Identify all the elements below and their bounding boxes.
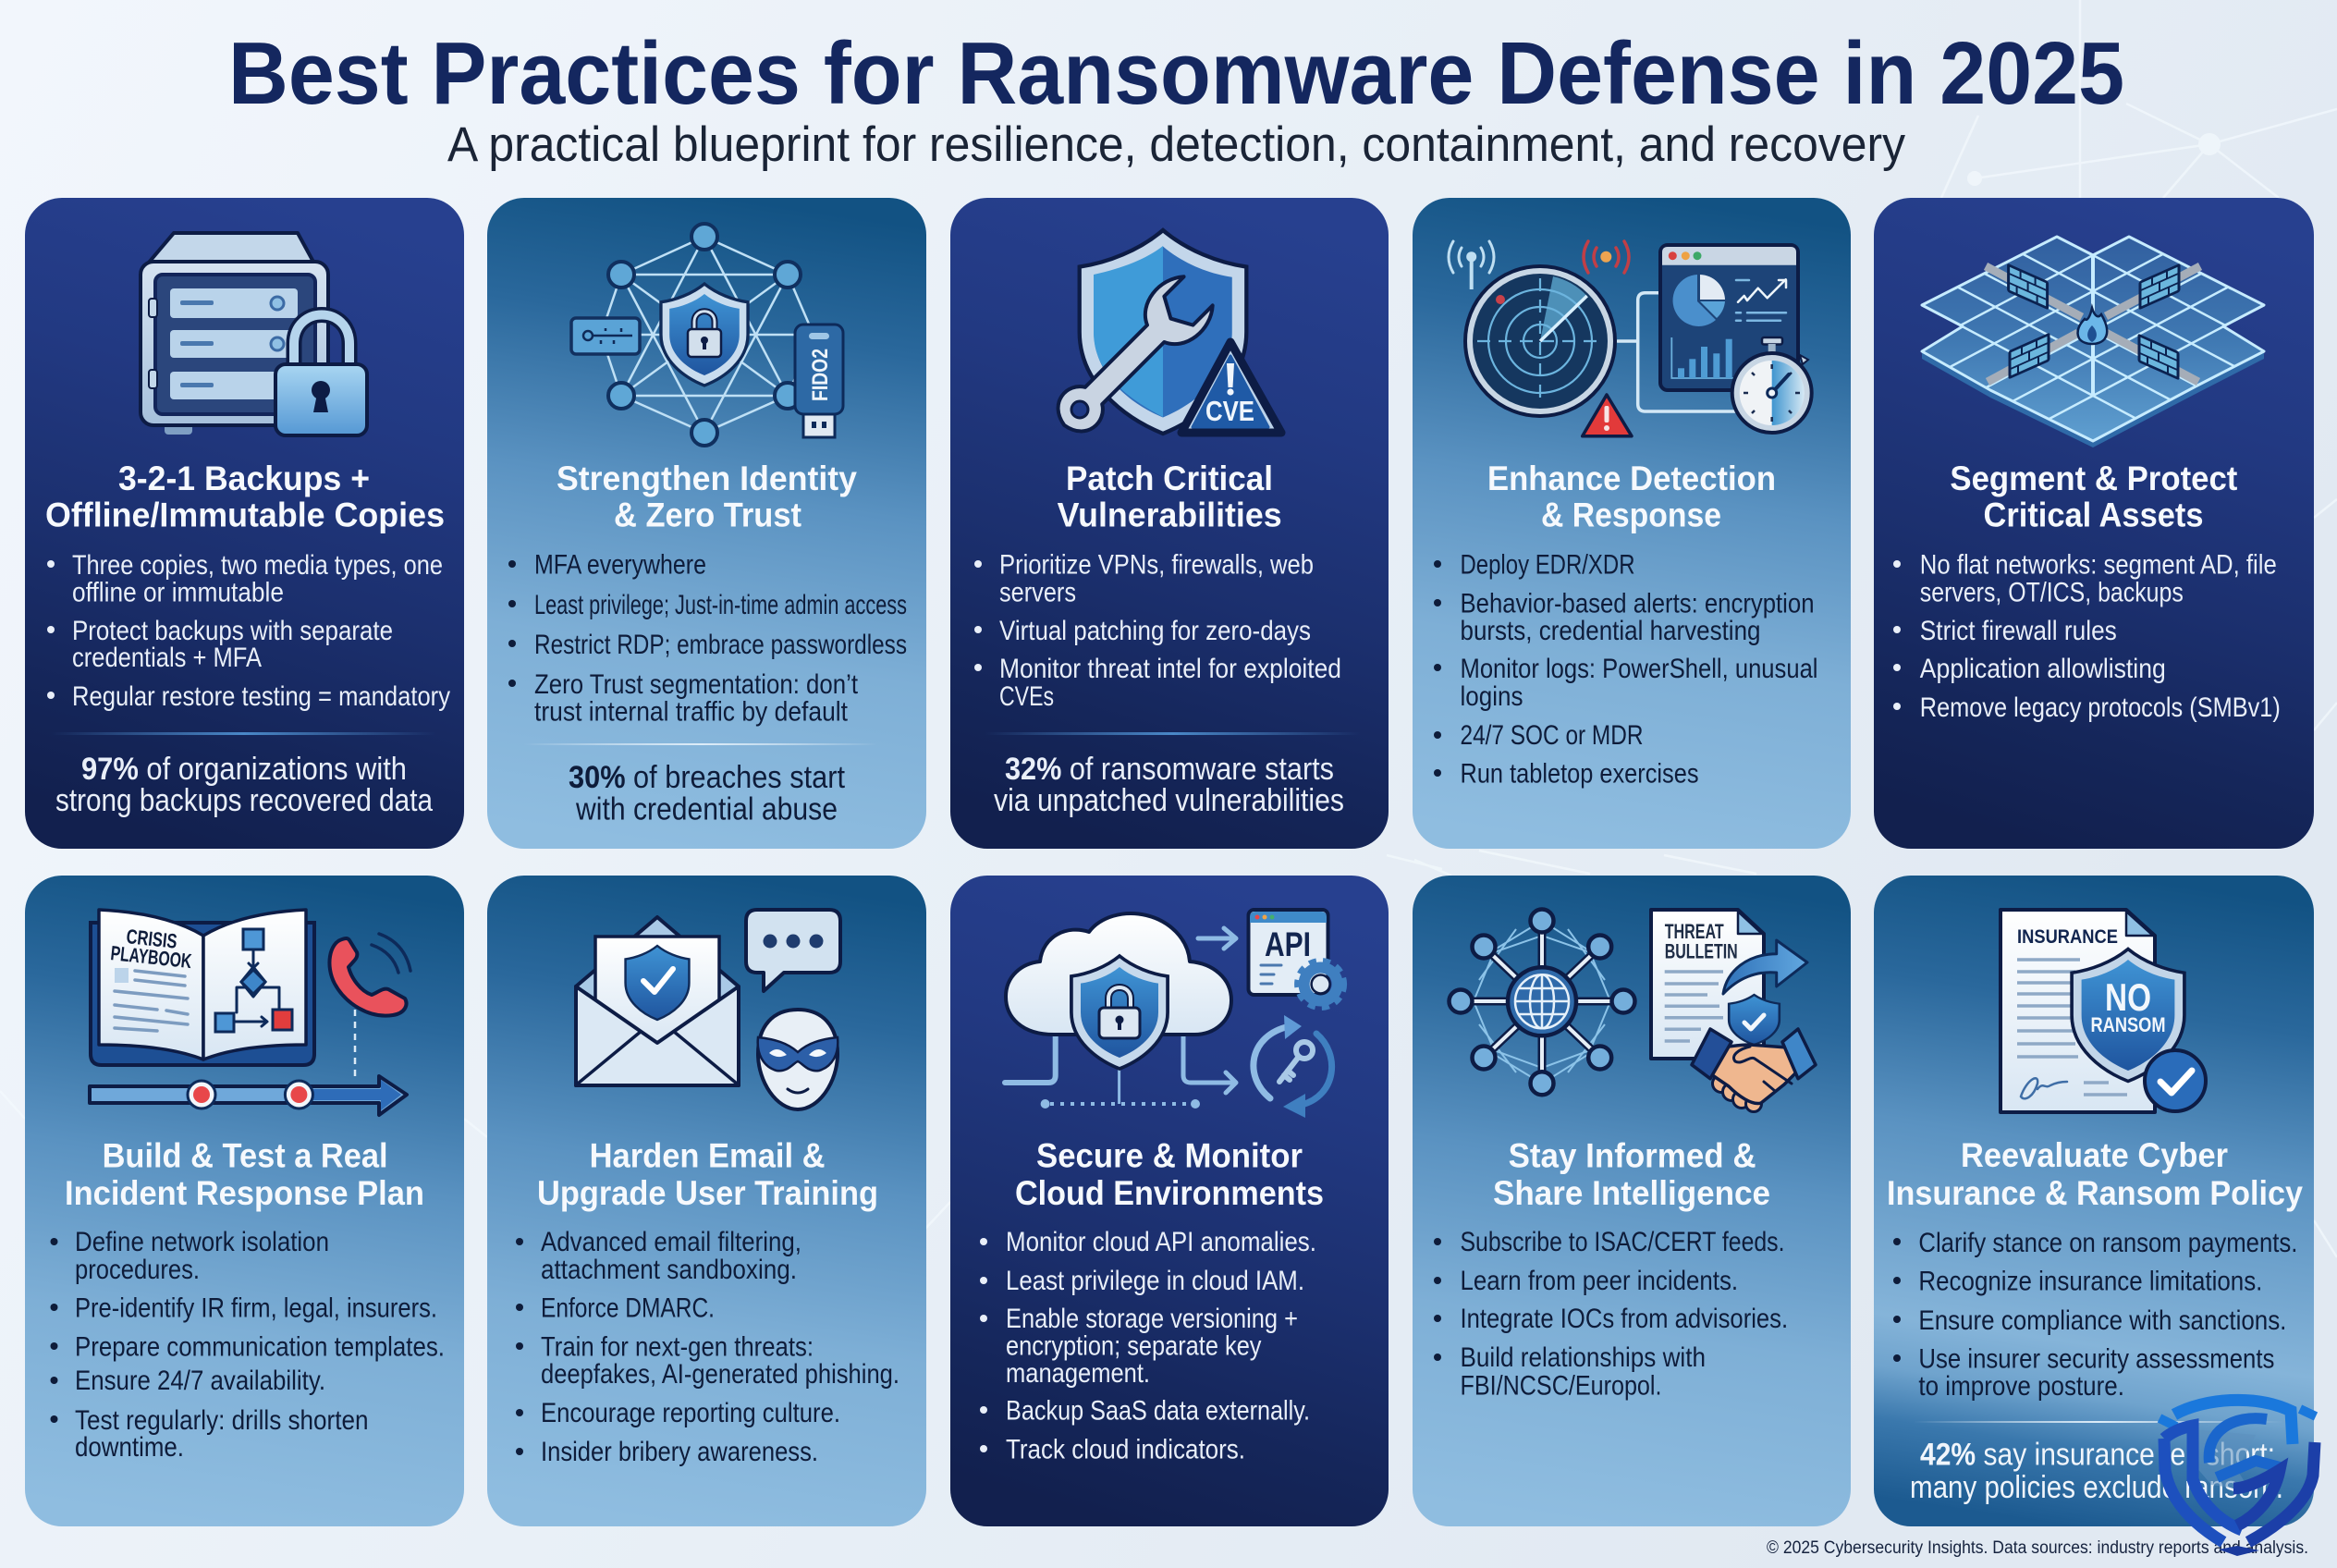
bullet list [1893, 1228, 2297, 1402]
bullet list: Train for next-gen threats: [541, 1332, 814, 1363]
icon: radar, dashboard and stopwatch [1449, 241, 1812, 436]
label: API: API [1265, 925, 1311, 963]
panel: segmentation [1874, 164, 2314, 849]
bullet list: 24/7 SOC or MDR [1461, 720, 1644, 751]
bullet list: attachment sandboxing. [541, 1255, 797, 1285]
label: threat bulletin: THREAT [1665, 920, 1724, 943]
bullet list: Least privilege; Just-in-time admin access [534, 590, 907, 620]
stat: 30%: 30% of breaches start [569, 760, 845, 795]
bullet list: Advanced email filtering, [541, 1227, 801, 1257]
heading: Strengthen Identity [557, 459, 857, 497]
bullet list: No flat networks: segment AD, file [1920, 549, 2277, 581]
bullet list: servers [999, 578, 1076, 608]
panel: detection and response [1413, 198, 1851, 849]
heading: Patch Critical [1066, 459, 1273, 497]
card background [25, 876, 464, 1526]
icon: identity network with shield, key card, FIDO2 key [571, 224, 843, 446]
bullet list: logins [1461, 681, 1523, 712]
bullet list: Run tabletop exercises [1461, 758, 1699, 790]
bullet list: Encourage reporting culture. [541, 1398, 840, 1428]
label: insurance: INSURANCE [2017, 926, 2118, 948]
bullet list [50, 1227, 445, 1463]
heading: Offline/Immutable Copies [45, 496, 445, 534]
icon: crisis playbook, phone and timeline [90, 910, 410, 1115]
heading: Insurance & Ransom Policy [1887, 1174, 2303, 1212]
bullet list: Monitor logs: PowerShell, unusual [1461, 654, 1817, 684]
bullet list: Ensure compliance with sanctions. [1918, 1305, 2286, 1336]
title: Best Practices for Ransomware Defense in 2025 [228, 24, 2124, 123]
bullet list: Zero Trust segmentation: don’t [534, 669, 859, 700]
heading: Build & Test a Real [103, 1137, 388, 1175]
heading [1950, 459, 2237, 534]
stat: 30%: with credential abuse [575, 792, 838, 827]
icon: envelope with shield, chat bubble and mask [576, 910, 840, 1109]
bullet list: offline or immutable [72, 578, 284, 608]
bullet list: Protect backups with separate [72, 616, 393, 646]
label: crisis playbook [109, 925, 193, 973]
panel: cyber insurance [1874, 876, 2314, 1526]
bullet list: Virtual patching for zero-days [999, 616, 1311, 646]
bullet list: Define network isolation [75, 1227, 329, 1257]
bullet list: Restrict RDP; embrace passwordless [534, 630, 907, 660]
heading: Vulnerabilities [1058, 496, 1282, 534]
heading [45, 459, 445, 534]
panel: email and user training [487, 876, 926, 1526]
bullet list: Integrate IOCs from advisories. [1461, 1304, 1788, 1334]
heading [1487, 459, 1776, 534]
bullet list: Regular restore testing = mandatory [72, 681, 450, 712]
heading [537, 1137, 878, 1212]
stat: 97% [55, 752, 433, 818]
label: crisis playbook: CRISIS [125, 925, 178, 953]
bullet list: Deploy EDR/XDR [1461, 549, 1634, 581]
label: CVE: CVE [1205, 395, 1254, 427]
card background [487, 876, 926, 1526]
bullet list: Track cloud indicators. [1006, 1435, 1245, 1464]
heading [1493, 1137, 1770, 1212]
heading: Harden Email & [590, 1137, 826, 1175]
bullet list: bursts, credential harvesting [1461, 616, 1760, 646]
bullet list: Monitor cloud API anomalies. [1006, 1227, 1316, 1257]
bullet list: Subscribe to ISAC/CERT feeds. [1461, 1227, 1784, 1257]
bullet list: downtime. [75, 1432, 184, 1463]
panel: cloud environments [950, 876, 1389, 1526]
panel: incident response plan [25, 876, 464, 1526]
heading: Reevaluate Cyber [1961, 1136, 2228, 1174]
label: no ransom: RANSOM [2091, 1013, 2165, 1036]
panel: patch vulnerabilities [950, 198, 1389, 849]
bullet list: to improve posture. [1918, 1371, 2124, 1402]
stat: 32% [994, 752, 1344, 818]
stat: 30% [569, 760, 845, 827]
stat: 42%: 42% say insurance fell short; [1920, 1438, 2275, 1473]
bullet list: procedures. [75, 1255, 200, 1285]
bullet list: MFA everywhere [534, 549, 706, 581]
label: threat bulletin: BULLETIN [1665, 940, 1738, 963]
bullet list: Three copies, two media types, one [72, 550, 443, 581]
card background [1413, 198, 1851, 849]
icon: insurance document with no-ransom shield [2001, 910, 2206, 1112]
heading: Incident Response Plan [65, 1174, 424, 1212]
icon: cloud shield, API window, gear and key rotation [1005, 910, 1344, 1118]
bullet list: deepfakes, AI-generated phishing. [541, 1359, 899, 1390]
card background [25, 198, 464, 849]
heading: Share Intelligence [1493, 1174, 1770, 1212]
heading: Critical Assets [1984, 496, 2204, 534]
bullet list: Build relationships with [1461, 1342, 1706, 1373]
bullet list: CVEs [999, 681, 1054, 712]
watermark logo [2160, 1400, 2316, 1556]
heading: Cloud Environments [1015, 1174, 1324, 1212]
panel: 3-2-1 backups [25, 198, 464, 849]
heading: 3-2-1 Backups + [118, 459, 370, 497]
bullet list: encryption; separate key [1006, 1331, 1261, 1362]
panel: identity and zero trust [487, 198, 926, 849]
heading [1058, 459, 1282, 534]
bullet list: Enable storage versioning + [1006, 1304, 1298, 1334]
subtitle: A practical blueprint for resilience, detection, containment, and recovery [447, 117, 1905, 172]
heading: Secure & Monitor [1036, 1137, 1303, 1175]
bullet list: management. [1006, 1358, 1150, 1389]
bullet list: Prepare communication templates. [75, 1332, 445, 1363]
bullet list: credentials + MFA [72, 643, 262, 673]
bullet list: servers, OT/ICS, backups [1920, 578, 2184, 608]
bullet list [980, 1227, 1316, 1464]
bullet list: Ensure 24/7 availability. [75, 1366, 325, 1396]
heading: & Zero Trust [614, 496, 801, 534]
card background [1874, 198, 2314, 849]
stat: 42%: many policies exclude ransom. [1910, 1470, 2283, 1505]
heading [1015, 1137, 1324, 1212]
label: crisis playbook: PLAYBOOK [109, 941, 193, 973]
bullet list: Use insurer security assessments [1918, 1344, 2274, 1375]
panel: threat intelligence [1413, 876, 1851, 1526]
bullet list [47, 550, 450, 712]
bullet list: Monitor threat intel for exploited [999, 654, 1341, 684]
card background [487, 198, 926, 849]
label: threat bulletin [1665, 920, 1738, 963]
heading: Upgrade User Training [537, 1174, 878, 1212]
heading [1887, 1136, 2303, 1212]
bullet list: Test regularly: drills shorten [75, 1405, 368, 1436]
bullet list [1434, 549, 1817, 790]
heading: & Response [1541, 496, 1721, 534]
bullet list: Pre-identify IR firm, legal, insurers. [75, 1293, 437, 1324]
label: no ransom [2091, 975, 2165, 1036]
icon: isometric segmented network with firewalls [1920, 235, 2266, 447]
label: no ransom: NO [2105, 975, 2151, 1019]
bullet list: Remove legacy protocols (SMBv1) [1920, 692, 2281, 723]
heading: Segment & Protect [1950, 459, 2237, 497]
heading [557, 459, 857, 534]
card background [950, 876, 1389, 1526]
heading [65, 1137, 424, 1212]
footer: © 2025 Cybersecurity Insights. Data sources: industry reports and analysis. [1767, 1538, 2308, 1558]
stat: 32%: via unpatched vulnerabilities [994, 783, 1344, 818]
stat: 97%: 97% of organizations with [81, 752, 407, 787]
label: FIDO2: FIDO2 [808, 349, 833, 401]
bullet list: trust internal traffic by default [534, 697, 849, 727]
icon: server safe with padlock [141, 233, 367, 435]
bullet list: Behavior-based alerts: encryption [1461, 588, 1814, 619]
card background [1874, 876, 2314, 1526]
bullet list [508, 549, 907, 727]
bullet list: Prioritize VPNs, firewalls, web [999, 549, 1314, 581]
bullet list: Enforce DMARC. [541, 1293, 715, 1324]
card background [950, 198, 1389, 849]
bullet list: Application allowlisting [1920, 654, 2166, 684]
bullet list [516, 1227, 899, 1467]
bullet list: Least privilege in cloud IAM. [1006, 1266, 1304, 1296]
stat: 32%: 32% of ransomware starts [1005, 752, 1334, 787]
card background [1413, 876, 1851, 1526]
bullet list [1893, 549, 2281, 723]
bullet list: Strict firewall rules [1920, 616, 2117, 646]
bullet list: FBI/NCSC/Europol. [1461, 1370, 1662, 1402]
icon: shield, wrench and CVE warning [1043, 230, 1281, 447]
bullet list [974, 549, 1341, 712]
stat: 42% [1910, 1438, 2283, 1505]
bullet list: Backup SaaS data externally. [1006, 1396, 1310, 1426]
icon: global hub, threat bulletin and handshake [1450, 910, 1816, 1111]
bullet list: Insider bribery awareness. [541, 1437, 818, 1467]
heading: Enhance Detection [1487, 459, 1776, 497]
bullet list [1434, 1227, 1788, 1402]
bullet list: Recognize insurance limitations. [1918, 1267, 2262, 1297]
stat: 97%: strong backups recovered data [55, 783, 433, 818]
heading: Stay Informed & [1509, 1137, 1756, 1175]
bullet list: Learn from peer incidents. [1461, 1266, 1738, 1296]
